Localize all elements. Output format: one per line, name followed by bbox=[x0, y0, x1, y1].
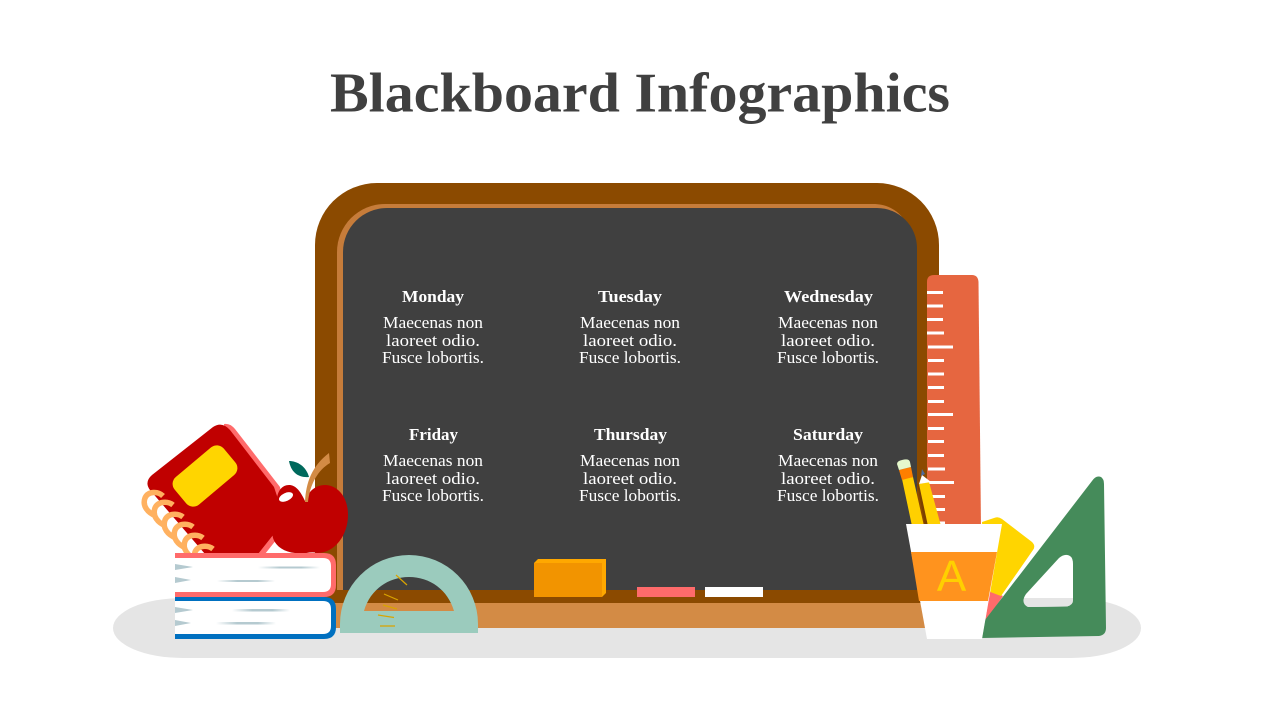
pencils bbox=[897, 459, 941, 526]
schedule: Tuesday: Tuesday bbox=[598, 287, 663, 306]
title: Blackboard Infographics bbox=[330, 62, 950, 124]
left pencil band bbox=[899, 467, 913, 480]
schedule: Wednesday: Wednesday bbox=[784, 287, 874, 306]
page marks bbox=[175, 564, 320, 626]
schedule: Monday: Fusce lobortis. bbox=[382, 348, 484, 367]
schedule: Tuesday bbox=[579, 287, 681, 367]
notebook spiral rings bbox=[144, 492, 213, 570]
schedule: Friday: Maecenas non bbox=[383, 451, 484, 470]
protractor bbox=[340, 555, 478, 633]
pink chalk bbox=[637, 587, 695, 597]
ground shadow bbox=[113, 598, 1141, 658]
schedule: Thursday: Thursday bbox=[594, 425, 668, 444]
schedule: Tuesday: laoreet odio. bbox=[583, 331, 677, 350]
schedule: Thursday bbox=[579, 425, 681, 505]
schedule: Wednesday: Maecenas non bbox=[778, 313, 879, 332]
apple leaf bbox=[289, 461, 309, 477]
schedule: Tuesday: Maecenas non bbox=[580, 313, 681, 332]
set square and yellow card bbox=[982, 476, 1106, 638]
board eraser bbox=[534, 559, 606, 597]
schedule: Friday bbox=[382, 425, 484, 505]
spiral notebook bbox=[144, 424, 288, 570]
schedule: Wednesday bbox=[777, 287, 879, 367]
white chalk bbox=[705, 587, 763, 597]
schedule: Saturday: laoreet odio. bbox=[781, 469, 875, 488]
schedule: Saturday: Maecenas non bbox=[778, 451, 879, 470]
pencil shadow bbox=[917, 483, 929, 526]
chalk ledge front bbox=[330, 603, 925, 628]
apple body bbox=[272, 485, 348, 554]
right pencil lead bbox=[921, 469, 925, 476]
schedule: Wednesday: laoreet odio. bbox=[781, 331, 875, 350]
bottom book pages bbox=[175, 601, 331, 634]
schedule: Tuesday: Fusce lobortis. bbox=[579, 348, 681, 367]
top book pages bbox=[175, 558, 331, 592]
apple bbox=[272, 453, 348, 554]
apple stem bbox=[305, 453, 330, 502]
blackboard bbox=[315, 183, 939, 628]
schedule: Thursday: Maecenas non bbox=[580, 451, 681, 470]
left pencil eraser bbox=[897, 459, 911, 470]
notebook back cover bbox=[224, 424, 288, 554]
apple highlight bbox=[278, 490, 294, 504]
chalk ledge top bbox=[330, 590, 925, 603]
board surface bbox=[343, 208, 917, 590]
cup band bbox=[911, 552, 997, 601]
pink card bbox=[985, 590, 1003, 622]
left pencil body bbox=[902, 477, 924, 526]
schedule: Wednesday: Fusce lobortis. bbox=[777, 348, 879, 367]
schedule: Saturday bbox=[777, 425, 879, 505]
ruler bbox=[927, 275, 981, 530]
frame inner edge bbox=[337, 204, 906, 590]
schedule: Saturday: Fusce lobortis. bbox=[777, 486, 879, 505]
pencil cup bbox=[906, 524, 1002, 639]
schedule: Thursday: laoreet odio. bbox=[583, 469, 677, 488]
stacked books bbox=[175, 553, 336, 639]
set square window shadow bbox=[1024, 598, 1073, 607]
schedule: Monday: Maecenas non bbox=[383, 313, 484, 332]
top book cover bbox=[175, 553, 336, 597]
schedule: Friday: Fusce lobortis. bbox=[382, 486, 484, 505]
schedule: Monday: Monday bbox=[402, 287, 464, 306]
right pencil tip bbox=[919, 475, 931, 484]
schedule: Monday bbox=[382, 287, 484, 367]
cup letter: A bbox=[937, 552, 967, 601]
schedule: Saturday: Saturday bbox=[793, 425, 864, 444]
schedule: Thursday: Fusce lobortis. bbox=[579, 486, 681, 505]
board frame bbox=[315, 183, 939, 603]
yellow card bbox=[982, 517, 1034, 596]
schedule: Friday: laoreet odio. bbox=[386, 469, 480, 488]
notebook label bbox=[169, 442, 241, 510]
bottom book cover bbox=[175, 597, 336, 639]
right pencil body bbox=[919, 482, 941, 526]
green set square bbox=[982, 476, 1106, 638]
schedule: Friday: Friday bbox=[409, 425, 458, 444]
schedule: Monday: laoreet odio. bbox=[386, 331, 480, 350]
notebook front cover bbox=[147, 425, 285, 554]
